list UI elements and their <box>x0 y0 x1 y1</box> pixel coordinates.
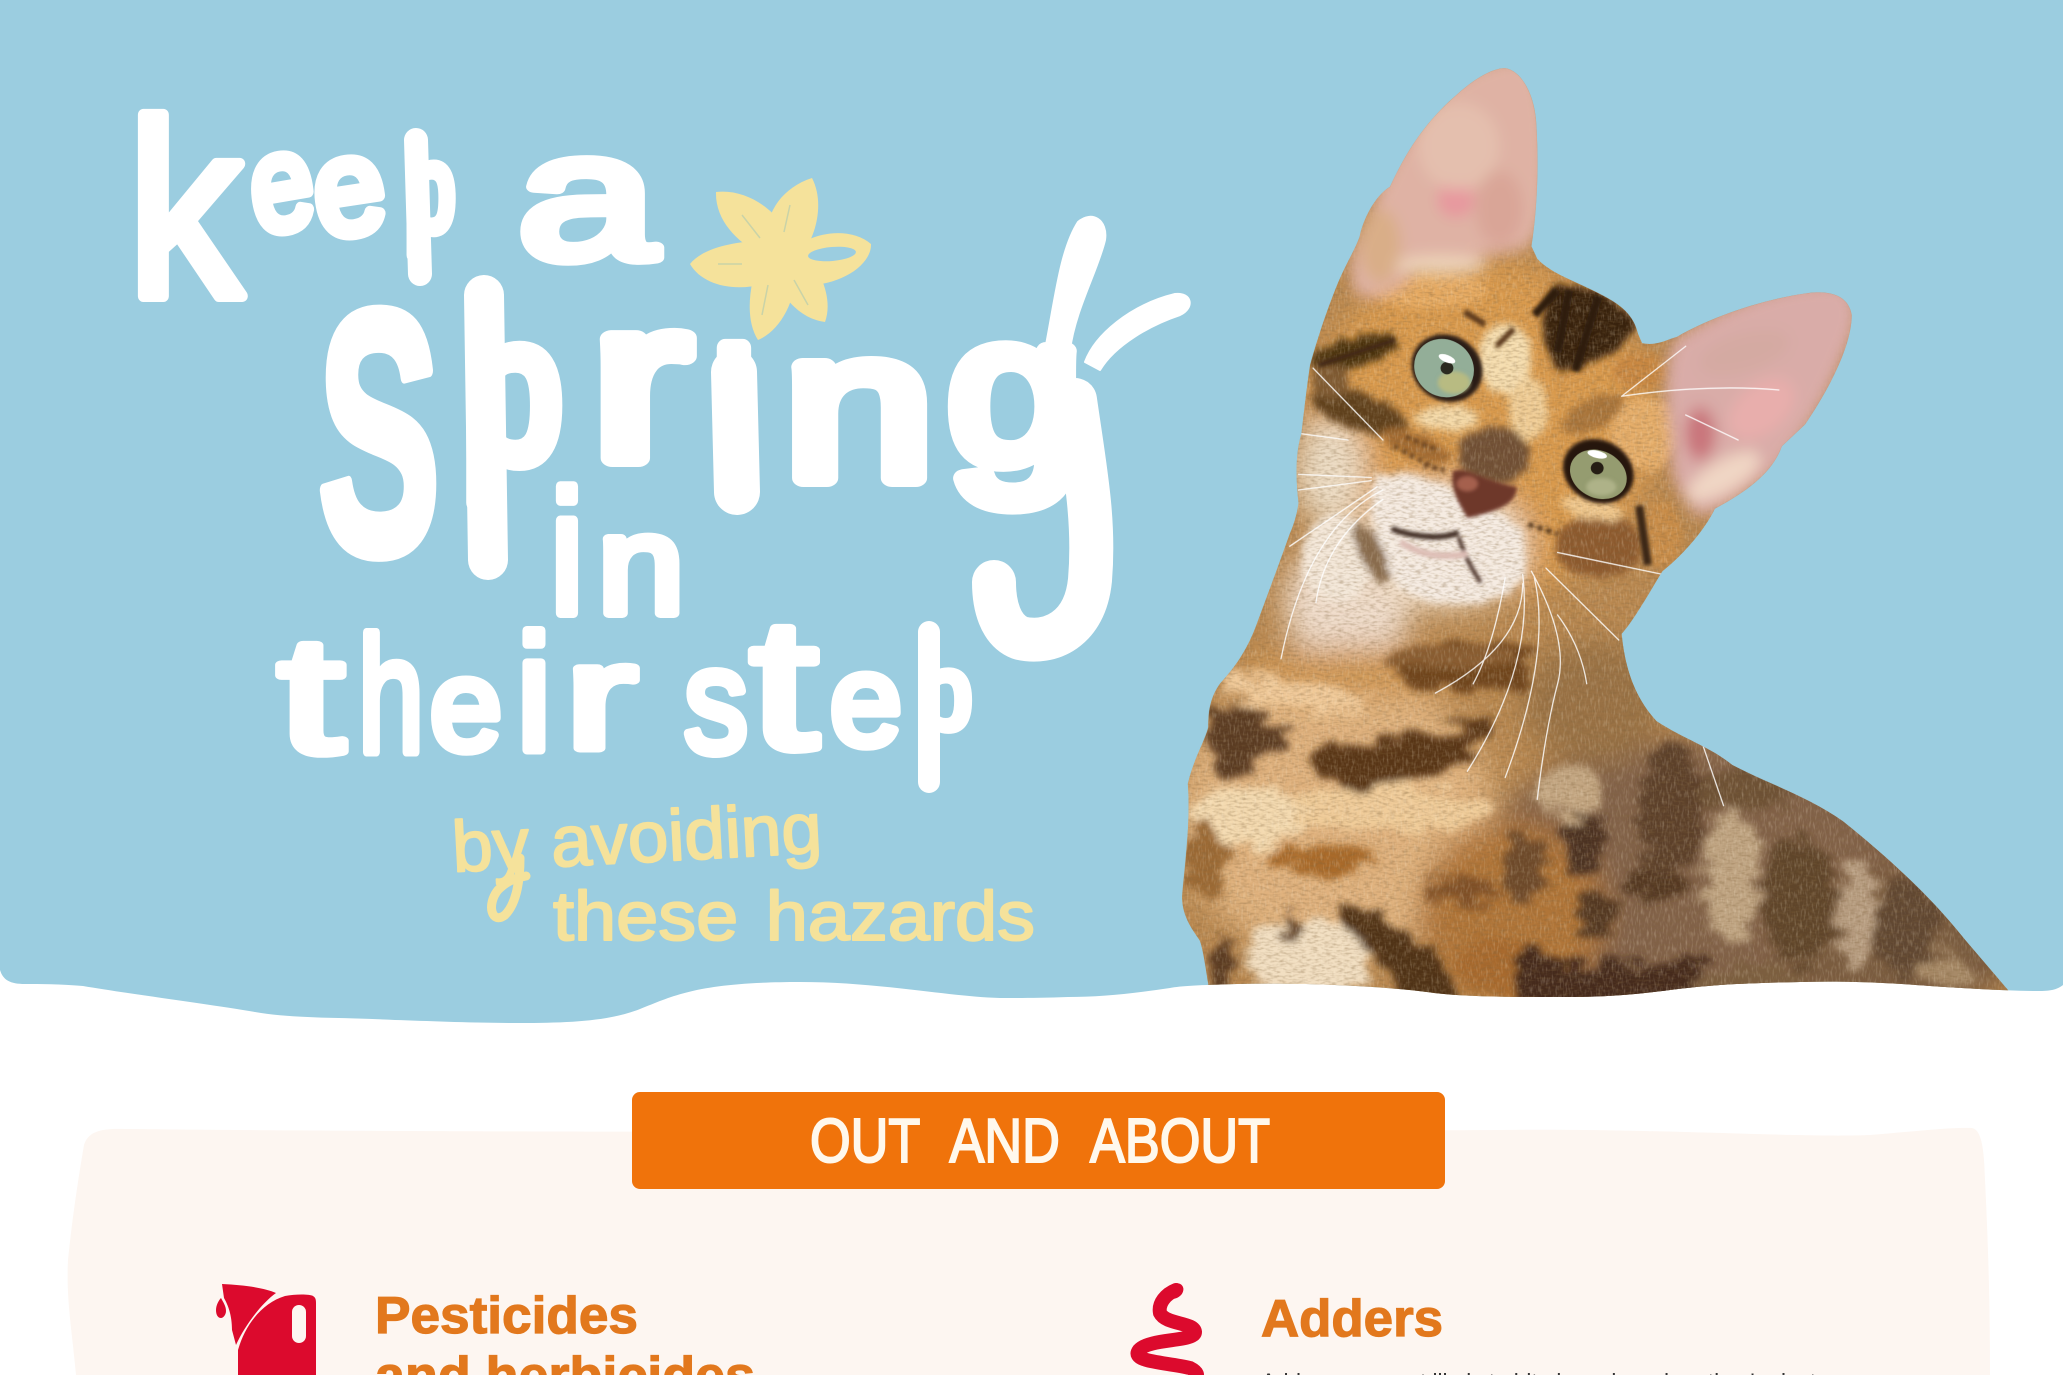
title line: keep a: e <box>303 107 393 267</box>
whiskers <box>1281 346 1779 806</box>
icon: flower <box>690 178 871 340</box>
cat photo illustration <box>1182 68 2008 997</box>
button: out and about heading <box>632 1092 1445 1189</box>
subtitle line 2: these hazards <box>553 877 1035 955</box>
subtitle: by avoiding these hazards <box>450 789 1035 955</box>
decoration: keep p stem <box>416 140 420 274</box>
title line: keep a: p <box>405 122 455 256</box>
heading: Pesticides and herbicides: Pesticides <box>375 1287 638 1345</box>
title line: their step: e <box>830 627 902 773</box>
title word: Spring: i <box>712 310 756 545</box>
panel: out and about background <box>68 1128 1990 1375</box>
icon: adder snake <box>1138 1280 1197 1375</box>
eye: right <box>1560 436 1637 507</box>
title line: their step: r <box>565 612 637 780</box>
heading: Adders: Adders <box>1261 1290 1443 1348</box>
title word: Spring: g <box>948 272 1082 507</box>
hero background <box>0 0 2063 1023</box>
title word: Spring: p <box>462 275 562 504</box>
button: out and about heading: OUT AND ABOUT <box>810 1107 1270 1176</box>
title line: their step: i <box>516 601 552 785</box>
title line: keep a: e <box>239 105 321 263</box>
title line: keep a: a <box>518 96 657 297</box>
title word: in: i <box>550 456 584 651</box>
decoration: Spring i stem <box>734 372 737 492</box>
nose <box>1452 470 1517 518</box>
title line: their step: p <box>916 634 972 751</box>
ear: left <box>1351 58 1546 297</box>
decoration: y loop <box>492 858 526 918</box>
fur texture <box>1182 249 2008 997</box>
title line: their step: e <box>430 632 502 778</box>
title line: their step: t <box>750 582 818 788</box>
title line: their step: t <box>278 603 344 787</box>
subtitle line 1: by avoiding <box>450 789 824 888</box>
title line: their step: s <box>684 616 748 784</box>
title word: Spring: S <box>318 241 440 626</box>
title word: Spring: r <box>592 254 690 506</box>
icon: bunny ear left <box>1045 217 1105 350</box>
decoration: Spring g tail <box>994 400 1091 640</box>
icon: bunny ear right <box>1085 294 1190 370</box>
title word: in: n <box>598 486 684 643</box>
decoration: Spring p stem <box>484 295 488 560</box>
ear: right <box>1666 283 1856 515</box>
title word: Spring: n <box>785 288 933 523</box>
title line: keep a: k <box>128 70 243 349</box>
icon: spray bottle <box>216 1284 316 1375</box>
title: keep a Spring in their step <box>128 70 1190 788</box>
eye: left <box>1408 331 1486 405</box>
decoration: step p stem <box>918 632 940 782</box>
title line: their step: h <box>358 603 424 787</box>
mouth <box>1392 529 1459 537</box>
